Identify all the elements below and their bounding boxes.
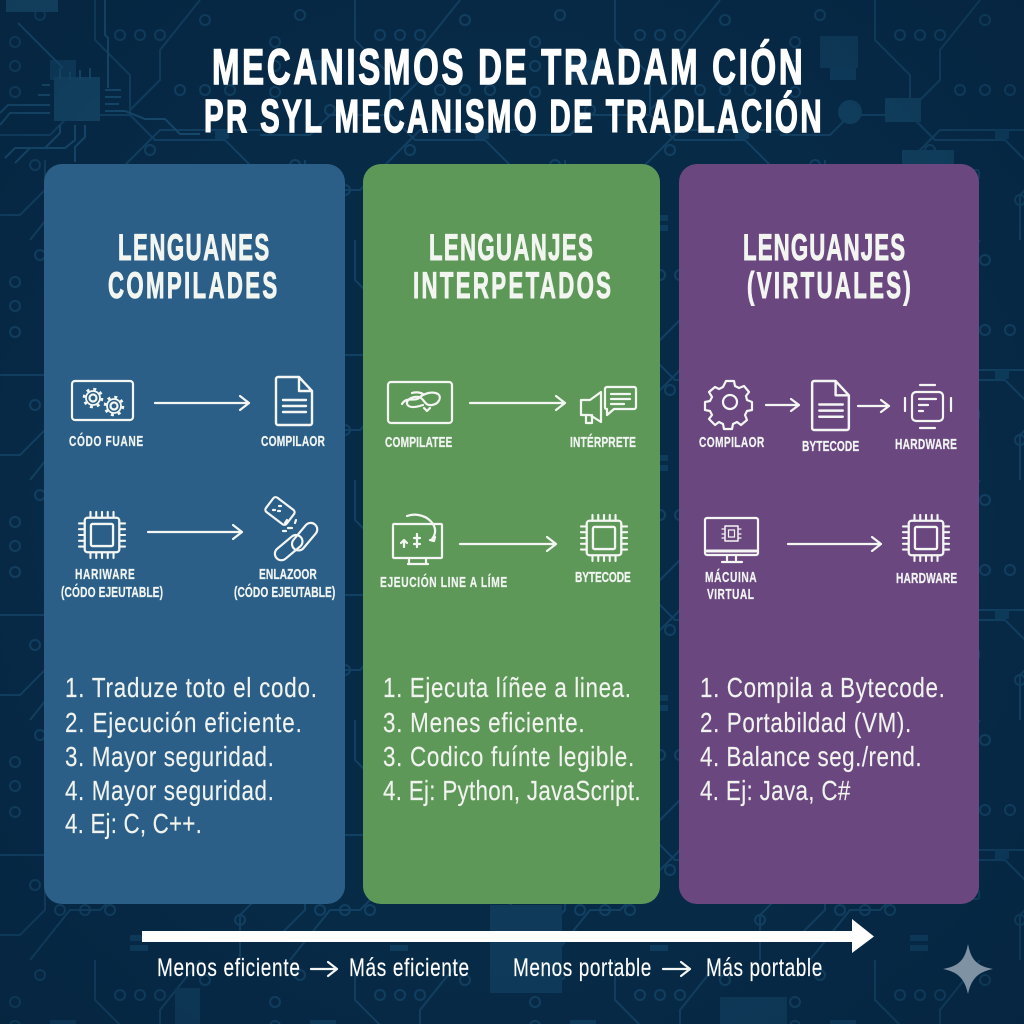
label: compilaor: COMPILAOR bbox=[261, 432, 325, 450]
labels: hardware and enlazador: (CÓDO EJEUTABLE) bbox=[61, 583, 163, 601]
label: interprete: INTÉRPRETE bbox=[570, 433, 636, 451]
heading: virtuales bbox=[743, 227, 911, 306]
labels: hardware and enlazador: HARIWARE bbox=[75, 565, 135, 583]
labels: maquina virtual: VIRTUAL bbox=[707, 585, 754, 603]
label: compilatee: COMPILATEE bbox=[385, 433, 453, 451]
icon: code loop window bbox=[388, 382, 452, 423]
heading: compilados: COMPILADES bbox=[108, 265, 277, 306]
list: virtuales: 2. Portabildad (VM). bbox=[700, 708, 911, 739]
heading: interpretados: LENGUANJES bbox=[429, 227, 593, 268]
label: hardware: HARDWARE bbox=[896, 569, 958, 587]
panel background blue bbox=[44, 164, 345, 904]
scale labels: Más eficiente bbox=[349, 953, 469, 982]
list: compilados: 2. Ejecución eficiente. bbox=[65, 708, 302, 739]
icon: hardware chip bbox=[903, 515, 949, 561]
arrow bbox=[155, 396, 249, 410]
icon: gear bbox=[705, 381, 752, 429]
label: codo fuane: CÓDO FUANE bbox=[69, 432, 143, 450]
list: interpretados: 3. Codico fuínte legible. bbox=[383, 742, 634, 773]
list: compilados: 4. Ej: C, C++. bbox=[65, 809, 202, 840]
list: compilados: 4. Mayor seguridad. bbox=[65, 776, 274, 807]
list: interpretados: 1. Ejecuta líñee a linea. bbox=[383, 673, 631, 704]
label: bytecode: BYTECODE bbox=[575, 568, 631, 586]
scale labels: Más portable bbox=[706, 953, 822, 982]
icon: document bbox=[276, 377, 312, 425]
list: compilados: 1. Traduze toto el codo. bbox=[65, 673, 317, 704]
list: interpretados: 4. Ej: Python, JavaScript. bbox=[383, 776, 641, 807]
icon: sparkle bbox=[943, 944, 993, 994]
labels: hardware and enlazador: (CÓDO EJEUTABLE) bbox=[234, 583, 335, 601]
icon: monitor with execution arrows bbox=[393, 515, 442, 564]
panel background green bbox=[363, 164, 660, 904]
list: compilados bbox=[65, 673, 317, 840]
label: compilaor: COMPILAOR bbox=[699, 433, 764, 451]
list: virtuales: 4. Ej: Java, C# bbox=[700, 776, 850, 807]
arrow bbox=[460, 537, 556, 551]
label: ejecucion linea a linea: EJEUCIÓN LINE A LÍME bbox=[380, 573, 508, 591]
icon: bytecode document bbox=[812, 381, 849, 430]
list: compilados: 3. Mayor seguridad. bbox=[65, 742, 274, 773]
list: interpretados: 3. Menes eficiente. bbox=[383, 708, 585, 739]
arrow bbox=[148, 525, 242, 539]
list: interpretados bbox=[383, 673, 641, 807]
heading: virtuales: LENGUANJES bbox=[743, 227, 905, 268]
scale labels: Menos portable bbox=[513, 953, 651, 982]
icon: hardware chip bbox=[79, 512, 125, 558]
label: bytecode: BYTECODE bbox=[802, 437, 859, 455]
labels: hardware and enlazador bbox=[61, 565, 335, 601]
panel: lenguajes virtuales bbox=[679, 164, 979, 904]
label: hardware: HARDWARE bbox=[895, 435, 957, 453]
heading: compilados: LENGUANES bbox=[118, 227, 269, 268]
icon: virtual machine monitor bbox=[705, 518, 758, 562]
title: MECANISMOS DE TRADAM CIÓN bbox=[212, 38, 803, 95]
labels: maquina virtual bbox=[705, 568, 757, 603]
labels: maquina virtual: MÁCUINA bbox=[705, 568, 757, 586]
icon: bytecode chip bbox=[581, 515, 627, 561]
heading: virtuales: (VIRTUALES) bbox=[747, 265, 911, 306]
title: PR SYL MECANISMO DE TRADLACIÓN bbox=[204, 90, 822, 143]
icon: chain link bbox=[264, 496, 320, 563]
arrow bbox=[470, 396, 565, 410]
list: virtuales bbox=[700, 673, 945, 807]
panel background purple bbox=[679, 164, 979, 904]
scale labels bbox=[157, 953, 822, 982]
icon: hardware device bbox=[905, 385, 951, 428]
scale labels: Menos eficiente bbox=[157, 953, 300, 982]
arrow: efficiency scale bbox=[142, 919, 874, 953]
list: virtuales: 4. Balance seg./rend. bbox=[700, 742, 922, 773]
labels: hardware and enlazador: ENLAZOOR bbox=[259, 565, 317, 583]
list: virtuales: 1. Compila a Bytecode. bbox=[700, 673, 945, 704]
panel: lenguajes compilados bbox=[44, 164, 345, 904]
icon: megaphone and speech bubble bbox=[581, 387, 636, 423]
arrow bbox=[788, 537, 881, 551]
heading: compilados bbox=[108, 227, 277, 306]
panel: lenguajes interpretados bbox=[363, 164, 660, 904]
arrow bbox=[766, 399, 799, 411]
title bbox=[204, 38, 822, 143]
arrow bbox=[858, 400, 889, 412]
heading: interpretados: INTERPETADOS bbox=[413, 265, 611, 306]
icon: source code gears bbox=[72, 381, 133, 420]
heading: interpretados bbox=[413, 227, 611, 306]
